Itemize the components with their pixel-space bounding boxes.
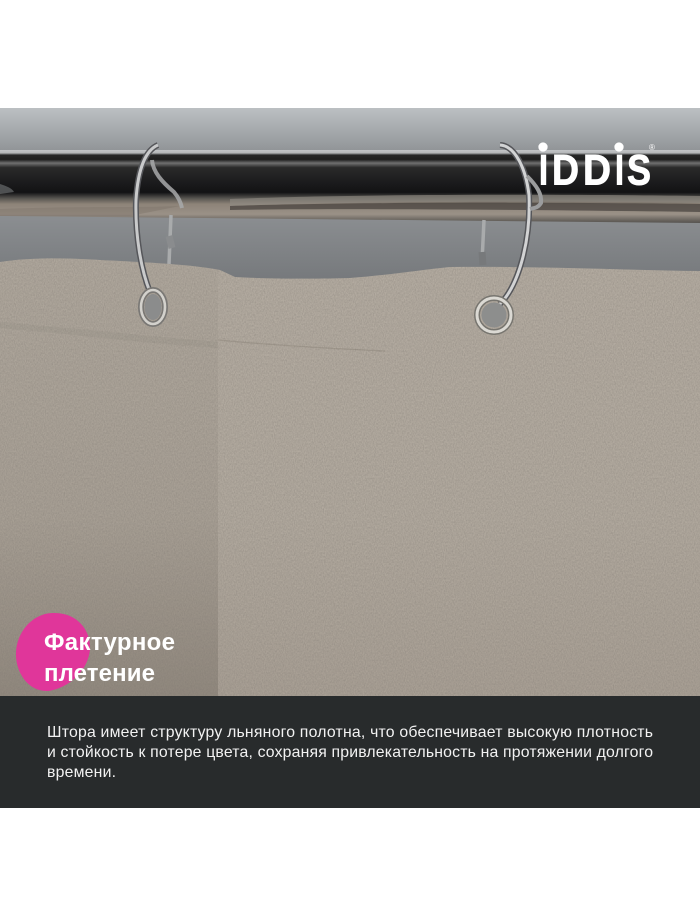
logo: IDDIS: ® <box>649 143 655 152</box>
description text: времени. <box>47 764 116 781</box>
heading: Фактурное <box>44 629 175 656</box>
heading <box>44 629 175 687</box>
heading: плетение <box>44 660 155 687</box>
logo: IDDIS: I <box>539 146 548 194</box>
logo: IDDIS: D <box>552 146 579 194</box>
photo: chrome curtain rod <box>0 150 700 223</box>
pink blob accent <box>16 613 90 691</box>
icon: left curtain ring with eyelet <box>136 145 182 324</box>
logo: IDDIS: S <box>627 146 651 194</box>
panel: description <box>0 696 700 808</box>
description text <box>47 724 653 781</box>
description text: и стойкость к потере цвета, сохраняя привлекательность на протяжении долгого <box>47 744 653 761</box>
icon: right curtain ring with eyelet <box>477 145 541 332</box>
logo: IDDIS: D <box>583 146 611 194</box>
logo: IDDIS: I <box>615 146 624 194</box>
photo: wall behind the rod <box>0 108 700 280</box>
photo: hooks behind the rings <box>169 215 484 265</box>
logo: IDDIS <box>539 143 655 194</box>
description text: Штора имеет структуру льняного полотна, что обеспечивает высокую плотность <box>47 724 653 741</box>
photo: linen curtain <box>0 250 700 696</box>
